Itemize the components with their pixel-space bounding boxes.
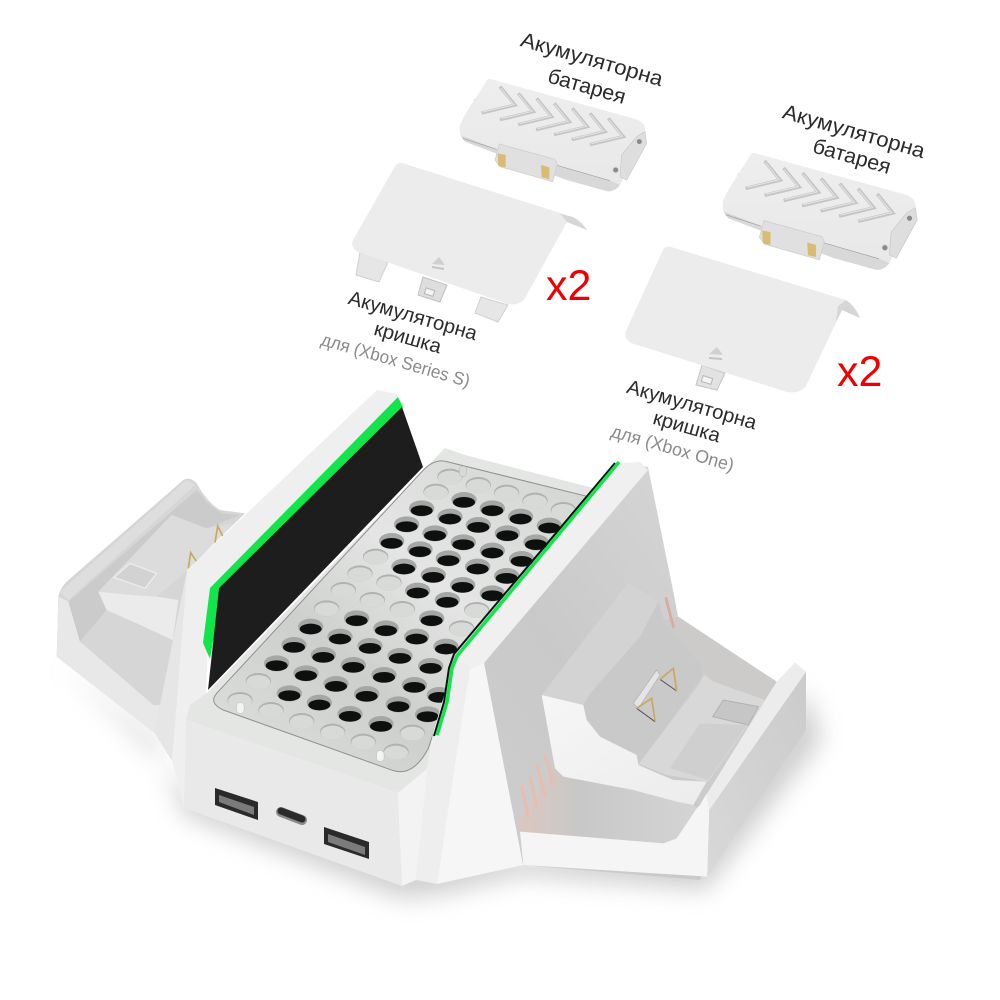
label: battery top: батарея (545, 65, 628, 109)
left dock tray front (98, 592, 178, 640)
label: cover One (609, 376, 760, 475)
ground shadow (60, 660, 822, 898)
left dock front wall (57, 597, 160, 733)
battery: right (723, 153, 917, 270)
plate locating pins (237, 466, 467, 761)
label: cover One: для (Xbox One) (609, 421, 736, 475)
battery: top (460, 79, 647, 191)
perforated vent plate (214, 461, 588, 772)
back floor behind cradle (663, 617, 777, 700)
copper charging pins (522, 755, 553, 817)
left tower (155, 390, 423, 808)
cradle white front (542, 695, 707, 805)
left gold contacts (188, 526, 223, 568)
base top face (186, 448, 593, 793)
cradle upper facet (542, 583, 658, 705)
battery cover: One (625, 247, 860, 392)
left dock rim (60, 480, 195, 600)
USB-A port right (324, 827, 369, 859)
USB-A port left (215, 788, 258, 820)
label: battery right: батарея (810, 135, 893, 179)
dock wall top rim (700, 663, 806, 810)
red quantity: x2 right: x2 (837, 348, 882, 396)
left charging dock (57, 479, 245, 760)
label: cover Series S: кришка (371, 318, 445, 359)
square recess right (713, 700, 758, 725)
label: cover Series S: для (Xbox Series S) (319, 329, 472, 391)
vent holes (227, 469, 576, 760)
cradle tray (638, 675, 765, 782)
green light strip right (434, 462, 619, 736)
label: battery right: Акумуляторна (780, 100, 928, 163)
battery cover: Series S (352, 163, 587, 322)
left dock inner back (68, 490, 240, 642)
gold contacts right (637, 668, 677, 722)
tower side face (484, 466, 777, 880)
left dock square recess (114, 563, 157, 588)
right charging dock (517, 583, 806, 877)
dock floor (517, 768, 697, 843)
right tower (416, 462, 648, 884)
label: battery top: Акумуляторна (518, 28, 666, 91)
front box with ports (184, 720, 427, 886)
black panel (208, 407, 423, 690)
cradle mid surface (586, 602, 703, 753)
USB-C port (281, 811, 302, 820)
label: cover One: кришка (650, 407, 724, 448)
label: cover Series S (319, 287, 480, 391)
contact slot (633, 670, 660, 708)
left dock tray top (98, 515, 233, 597)
red quantity: x2 left: x2 (546, 262, 591, 310)
dock outer wall (707, 672, 806, 877)
left dock floor (80, 610, 173, 705)
dock bottom rim (520, 793, 709, 877)
label: cover One: Акумуляторна (624, 376, 760, 435)
green light strip left (203, 397, 403, 659)
back copper pin (666, 598, 673, 627)
lower tray panel (670, 723, 747, 780)
label: cover Series S: Акумуляторна (346, 287, 480, 345)
